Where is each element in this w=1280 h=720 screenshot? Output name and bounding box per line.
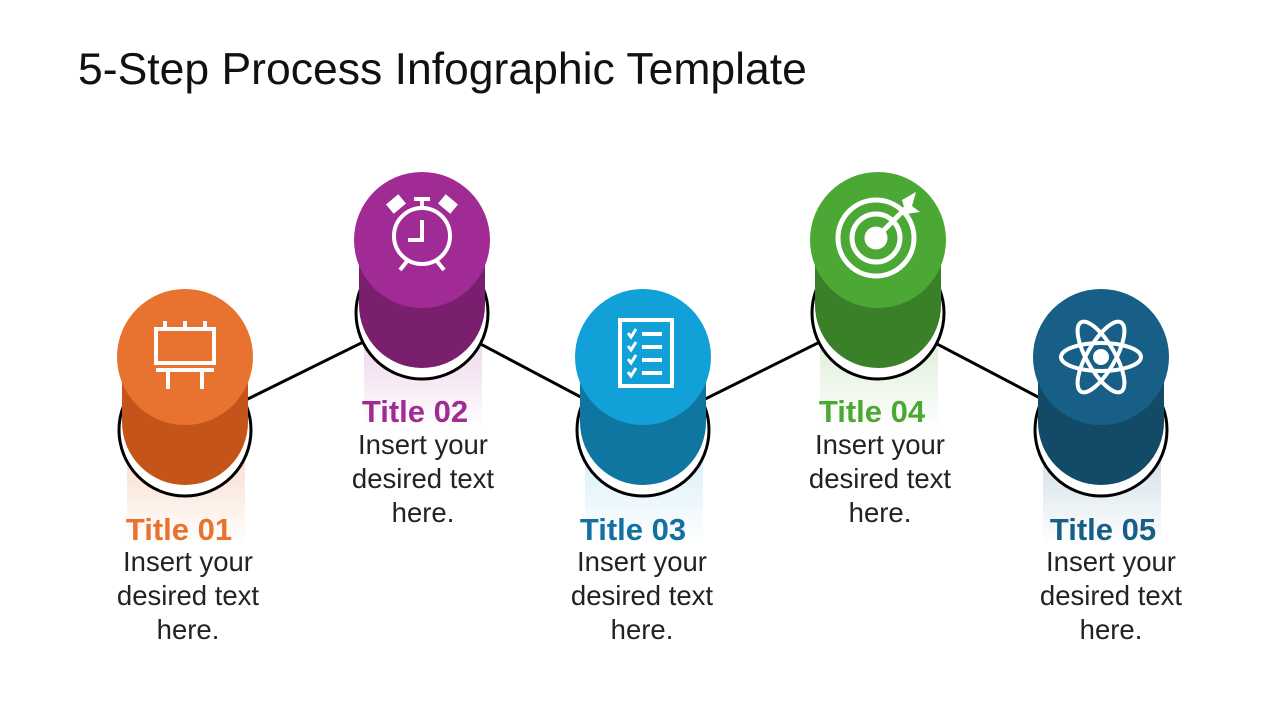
connector line (185, 313, 1101, 430)
text: step 4: Title 04 (819, 394, 926, 429)
step 3 cylinder (575, 289, 711, 545)
text: step 3: desired text (571, 580, 713, 611)
title: 5-Step Process Infographic Template (78, 45, 807, 94)
text: step 4: desired text (809, 463, 951, 494)
text: step 5: Title 05 (1050, 512, 1156, 547)
text: step 1: Title 01 (126, 512, 232, 547)
text: step 4: Insert your (815, 429, 945, 460)
text: step 3 (571, 512, 713, 645)
text: step 5: here. (1080, 614, 1142, 645)
icon: checklist (620, 320, 672, 386)
text: step 2: Insert your (358, 429, 488, 460)
step 5 cylinder (1033, 289, 1169, 545)
text: step 5: desired text (1040, 580, 1182, 611)
text: step 2: desired text (352, 463, 494, 494)
text: step 2 (352, 394, 494, 528)
text: step 1: here. (157, 614, 219, 645)
text: step 3: Title 03 (580, 512, 686, 547)
text: step 4 (809, 394, 951, 528)
text: step 2: Title 02 (362, 394, 468, 429)
step 2 cylinder (354, 172, 490, 428)
text: step 1: desired text (117, 580, 259, 611)
text: step 5: Insert your (1046, 546, 1176, 577)
text: step 1 (117, 512, 259, 645)
text: step 5 (1040, 512, 1182, 645)
step 1 cylinder (117, 289, 253, 545)
icon: billboard (156, 321, 214, 389)
text: step 3: Insert your (577, 546, 707, 577)
text: step 4: here. (849, 497, 911, 528)
text: step 2: here. (392, 497, 454, 528)
icon: alarm clock (394, 199, 450, 270)
step 4 cylinder (810, 172, 946, 428)
text: step 3: here. (611, 614, 673, 645)
icon: target (838, 200, 914, 276)
icon: atom (1061, 315, 1141, 399)
text: step 1: Insert your (123, 546, 253, 577)
